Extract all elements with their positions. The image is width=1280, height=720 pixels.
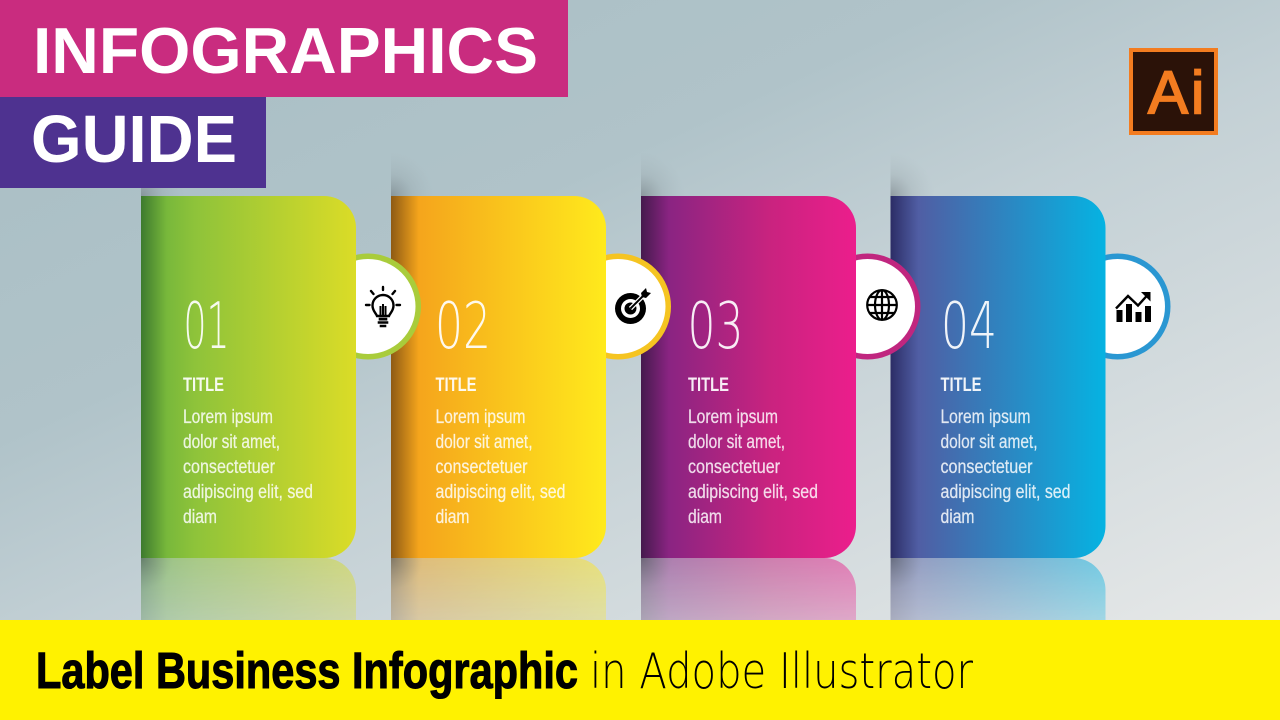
card 01 reflection — [141, 558, 356, 620]
card 03 text: dolor sit amet, — [688, 432, 785, 453]
card 04 text: adipiscing elit, sed — [940, 482, 1070, 503]
card 03 text: Lorem ipsum — [688, 407, 778, 428]
card 01 text: adipiscing elit, sed — [183, 482, 313, 503]
panel: card 01 — [141, 196, 421, 640]
card 03 text: diam — [688, 507, 722, 528]
heading: infographics banner — [0, 0, 568, 97]
heading: guide banner: GUIDE — [31, 102, 237, 177]
card 04 body — [890, 196, 1106, 558]
card 03 body — [641, 196, 856, 558]
icon: adobe illustrator logo — [1129, 48, 1218, 135]
card 04 top shadow — [890, 152, 934, 196]
card 02 top shadow — [391, 152, 435, 196]
card 04 title: TITLE — [940, 374, 982, 396]
card 04 number: 04 — [941, 290, 997, 364]
card 02 text: adipiscing elit, sed — [436, 482, 566, 503]
panel: card 03 — [641, 152, 920, 640]
card 02 icon: target with arrow — [565, 254, 671, 360]
card 04 text: consectetuer — [940, 457, 1033, 478]
card 03 text: consectetuer — [688, 457, 781, 478]
card 02 text: Lorem ipsum — [436, 407, 526, 428]
card 02 text — [436, 407, 566, 528]
card 02 reflection — [391, 558, 606, 620]
card shadows: left of reflections and tops — [141, 152, 923, 590]
card 03 text — [688, 407, 818, 528]
card 03 number: 03 — [688, 290, 744, 364]
card 02 text: diam — [436, 507, 470, 528]
footer title banner: in Adobe Illustrator — [590, 643, 974, 700]
card 01 text: dolor sit amet, — [183, 432, 280, 453]
footer title banner — [0, 620, 1280, 720]
heading: infographics banner: INFOGRAPHICS — [33, 14, 538, 87]
card 02 body — [391, 196, 606, 558]
card 03 title: TITLE — [688, 374, 729, 396]
icon: adobe illustrator logo: Ai — [1148, 59, 1204, 126]
card 03 reflection — [641, 558, 856, 620]
card 01 number: 01 — [184, 290, 230, 364]
card 04 icon: rising bar chart — [1064, 254, 1170, 360]
card 04 text: Lorem ipsum — [940, 407, 1030, 428]
heading: guide banner — [0, 97, 266, 188]
footer title banner: Label Business Infographic — [36, 642, 578, 699]
card 03 icon: globe — [814, 254, 920, 360]
card 04 reflection — [890, 558, 1106, 620]
card 01 icon: light bulb — [315, 254, 421, 360]
card 01 text — [183, 407, 313, 528]
panel: card 02 — [391, 152, 671, 640]
card 01 text: consectetuer — [183, 457, 276, 478]
card 01 body — [141, 196, 356, 558]
card 04 text: dolor sit amet, — [940, 432, 1038, 453]
card 01 text: Lorem ipsum — [183, 407, 273, 428]
card 01 text: diam — [183, 507, 217, 528]
card 02 title: TITLE — [436, 374, 476, 396]
card 03 top shadow — [641, 152, 685, 196]
card 02 text: dolor sit amet, — [436, 432, 532, 453]
card 04 text — [940, 407, 1070, 528]
card 02 number: 02 — [435, 290, 491, 364]
card 02 text: consectetuer — [436, 457, 528, 478]
card 01 title: TITLE — [183, 374, 224, 396]
card 04 text: diam — [940, 507, 974, 528]
panel: card 04 — [890, 152, 1170, 640]
card 03 text: adipiscing elit, sed — [688, 482, 818, 503]
